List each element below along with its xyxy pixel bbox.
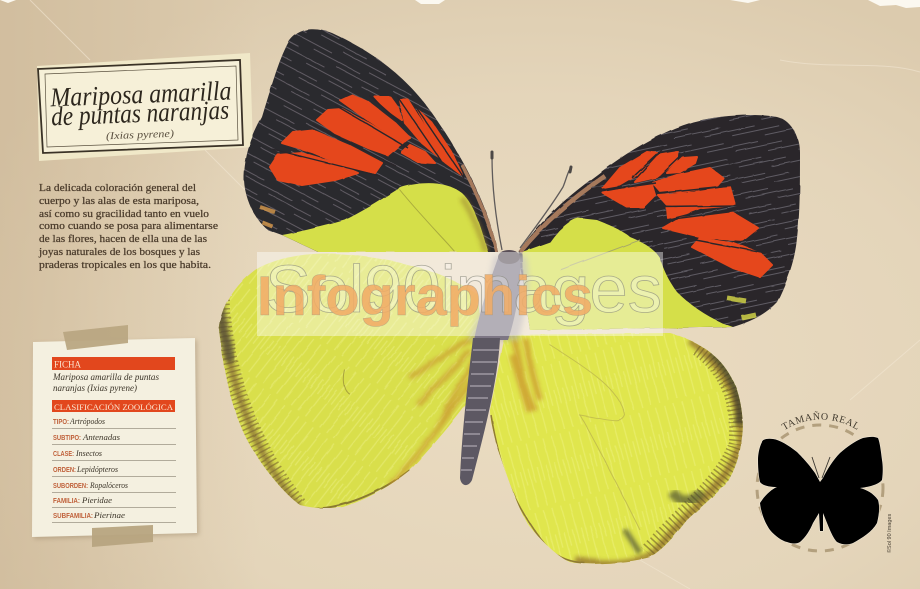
watermark outline text: Sol90images — [265, 252, 662, 327]
ficha name — [52, 372, 159, 393]
watermark band — [257, 252, 663, 336]
veins over orange — [600, 150, 772, 254]
classification rows: Pieridae — [81, 495, 112, 505]
left hindwing — [215, 248, 487, 510]
intro paragraph: joyas naturales de los bosques y las — [38, 246, 200, 258]
card paper — [37, 53, 253, 161]
ficha name: Mariposa amarilla de puntas — [52, 372, 159, 382]
tape bottom — [92, 525, 153, 547]
left forewing — [240, 25, 502, 255]
costa stripe — [520, 176, 605, 252]
watermark — [257, 252, 663, 336]
classification rows: Pierinae — [93, 510, 125, 520]
thorax — [474, 252, 520, 340]
classification rows: Antenadas — [82, 432, 121, 442]
real size label: TAMAÑO REAL — [781, 411, 858, 430]
right hindwing — [488, 330, 746, 566]
classification rows: CLASE: — [53, 451, 74, 458]
yellow area — [522, 218, 733, 332]
orange bands — [603, 152, 772, 277]
ficha name: naranjas (Ixias pyrene) — [53, 383, 137, 393]
classification rows: FAMILIA: — [53, 498, 80, 505]
classification rows: Insectos — [75, 448, 103, 458]
hairs — [468, 256, 528, 340]
butterfly body — [460, 152, 571, 485]
card frame — [38, 60, 243, 153]
classification header: CLASIFICACIÓN ZOOLÓGICA — [54, 402, 174, 412]
real size silhouette — [756, 411, 893, 553]
costa stripe — [462, 165, 497, 252]
veins over orange — [272, 96, 464, 178]
title card — [37, 53, 253, 161]
title text: (Ixias pyrene) — [106, 129, 175, 142]
intro paragraph: cuerpo y las alas de esta mariposa, — [39, 195, 199, 207]
silhouette halo and shape — [758, 437, 883, 544]
dashed circle — [757, 425, 883, 551]
abdomen — [460, 338, 500, 485]
card paper — [32, 338, 197, 537]
classification rows — [52, 416, 176, 522]
intro paragraph — [38, 182, 218, 271]
credit: ©Sol 90 Images — [886, 514, 893, 553]
intro paragraph: como cuando se posa para alimentarse — [39, 220, 218, 232]
watermark orange text: Infographics — [257, 264, 593, 327]
antennae — [492, 156, 570, 250]
classification rows: Ropalóceros — [89, 480, 129, 490]
classification rows: TIPO: — [53, 419, 69, 426]
title text — [49, 75, 233, 144]
classification rows: SUBTIPO: — [53, 435, 81, 442]
silhouette antennae — [812, 457, 830, 478]
card shadow — [34, 340, 199, 539]
title text: Mariposa amarilla — [49, 75, 232, 112]
tape top — [63, 325, 128, 350]
yellow area — [282, 183, 488, 252]
orange bands — [270, 95, 462, 185]
right forewing — [515, 112, 803, 332]
tan spots — [260, 207, 275, 226]
classification rows: Lepidópteros — [76, 464, 119, 474]
classification rows: SUBFAMILIA: — [53, 513, 93, 520]
intro paragraph: de las flores, hacen de ella una de las — [39, 233, 207, 245]
data card: ficha — [32, 325, 199, 547]
intro paragraph: praderas tropicales en los que habita. — [39, 259, 211, 271]
ficha header: FICHA — [54, 360, 82, 370]
classification rows: SUBORDEN: — [53, 483, 88, 490]
head — [498, 250, 520, 264]
classification rows: Artrópodos — [69, 416, 106, 426]
intro paragraph: La delicada coloración general del — [39, 182, 196, 194]
ficha header — [52, 357, 175, 370]
butterfly illustration — [215, 25, 803, 566]
intro paragraph: así como su gracilidad tanto en vuelo — [39, 208, 210, 220]
classification rows: ORDEN: — [53, 467, 76, 474]
yellow spots — [727, 298, 756, 318]
title text: de puntas naranjas — [51, 95, 230, 131]
